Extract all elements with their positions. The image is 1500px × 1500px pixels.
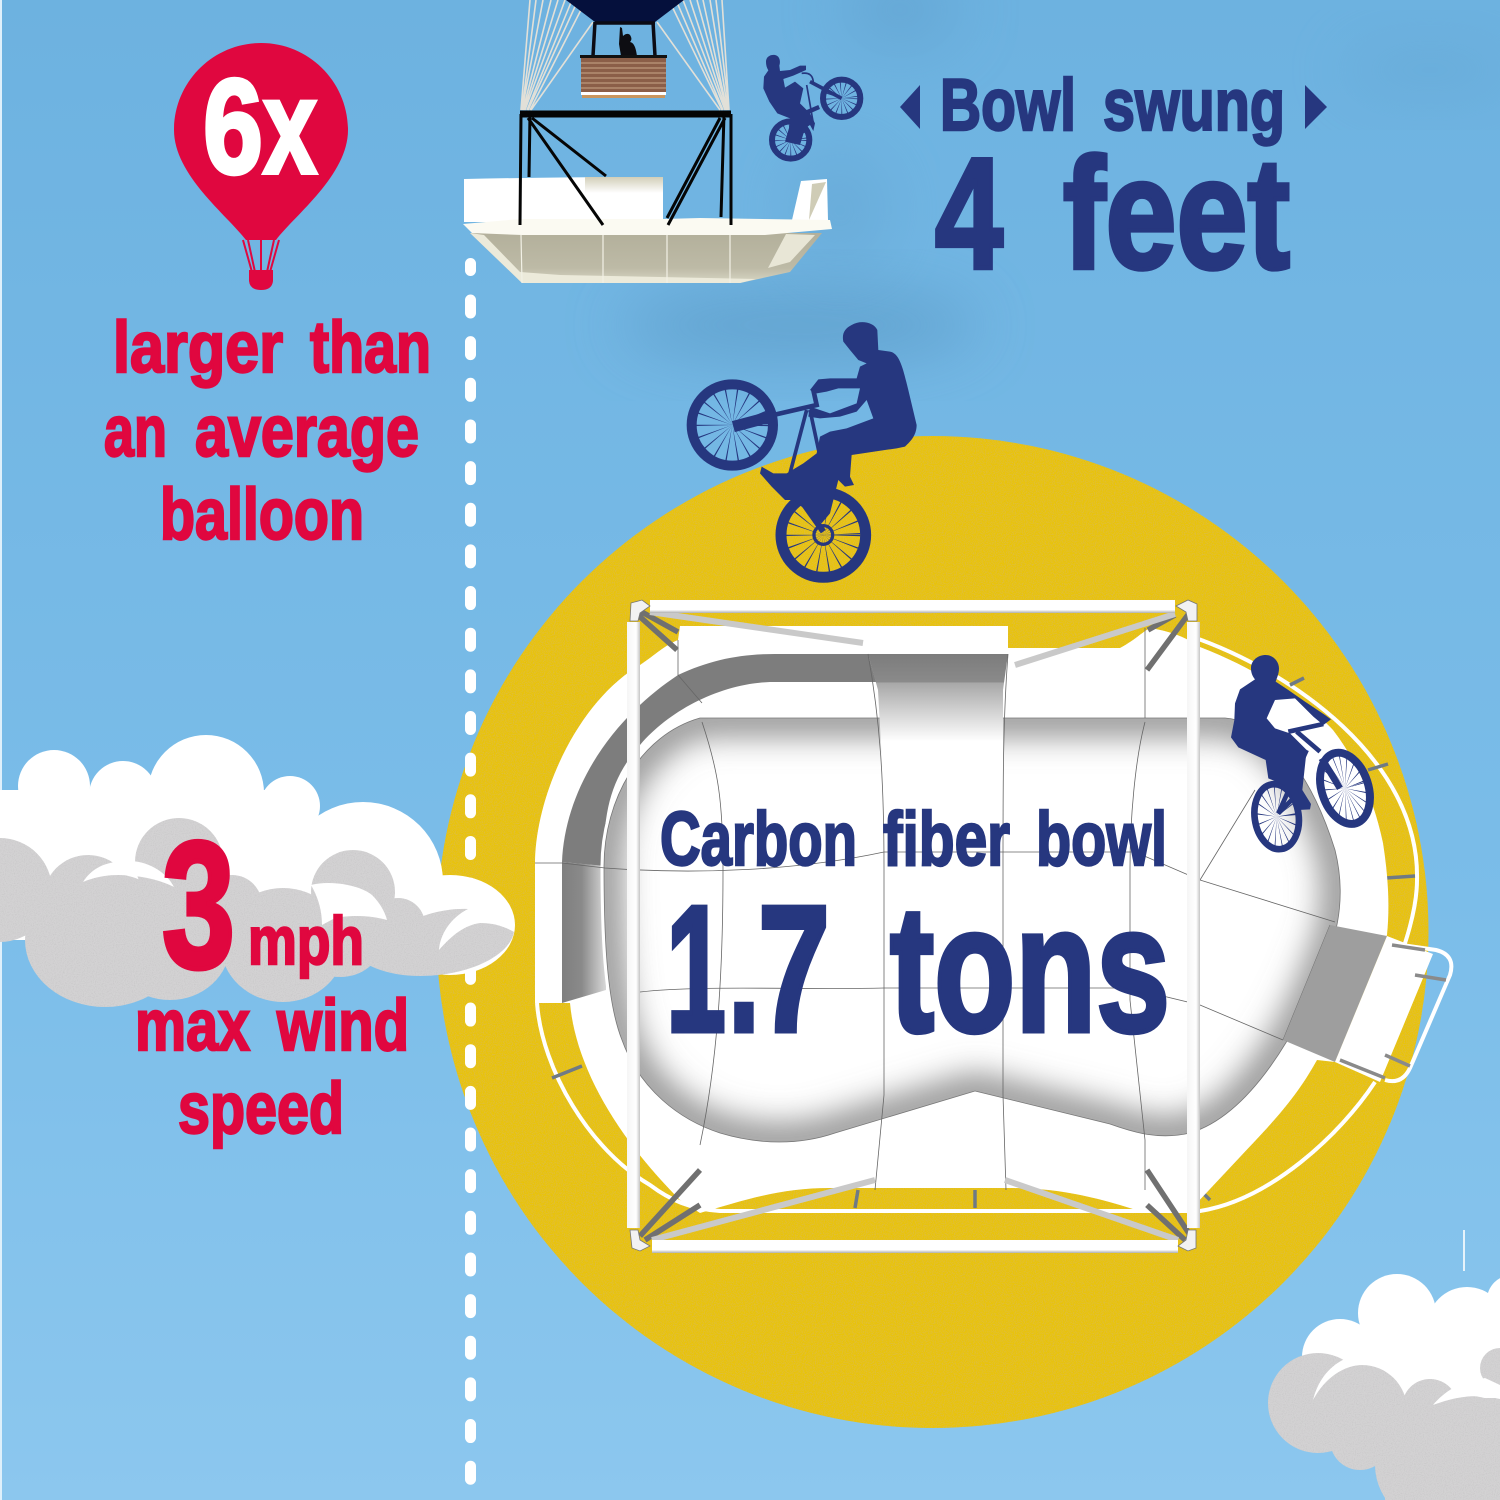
caption: larger (113, 308, 283, 388)
caption: than (310, 308, 431, 388)
cyclist silhouette, top (763, 55, 860, 159)
small white tick mark (1463, 1230, 1465, 1271)
carbon fiber bowl, top view (535, 600, 1451, 1253)
bowl lip (604, 718, 1340, 1142)
hot air balloon and suspended bowl, side view (463, 0, 832, 283)
value (162, 805, 364, 1006)
value: tons (890, 869, 1170, 1070)
burner frame (593, 22, 655, 56)
label (660, 797, 1167, 882)
bottom bar of frame (652, 1240, 1178, 1253)
gray cloud underside (1268, 1348, 1500, 1500)
white cloud top (0, 735, 515, 975)
value (666, 869, 1170, 1070)
label: Carbon (660, 797, 857, 882)
left arrow (900, 85, 920, 129)
rider body (763, 55, 820, 145)
caption (104, 308, 431, 555)
pilot (619, 27, 637, 56)
bike frame (1288, 724, 1323, 752)
rear wheel (1250, 781, 1303, 852)
top bar of frame (650, 600, 1175, 613)
ring spokes (552, 678, 1415, 1208)
rider body (1231, 655, 1331, 810)
value: mph (248, 903, 364, 979)
right post of frame (1187, 622, 1200, 1228)
white crescents (83, 861, 387, 925)
gray curved channel (562, 654, 876, 866)
value: . (728, 869, 760, 1070)
stat: 6x larger balloon (104, 43, 431, 555)
value: feet (1063, 126, 1290, 302)
rider body (760, 322, 917, 523)
yellow circle (436, 436, 1428, 1428)
caption (135, 986, 409, 1149)
rear wheel (772, 121, 809, 159)
balloon envelope (566, 0, 684, 22)
label: swung (1103, 65, 1285, 146)
stat: carbon fiber bowl 1.7 tons (660, 797, 1170, 1070)
caption: an (104, 392, 167, 472)
center shaded section (868, 654, 1008, 800)
white deck (535, 626, 1388, 1213)
value: 6x (203, 51, 317, 202)
outer safety ring (537, 636, 1417, 1211)
value (935, 126, 1290, 302)
panel seams (535, 628, 1335, 1190)
rear wheel (781, 493, 866, 577)
stat: 3 mph max wind speed (135, 805, 409, 1149)
white cloud top (1302, 1274, 1500, 1410)
bowl rim (604, 718, 1340, 1142)
front wheel (692, 384, 773, 466)
caption: balloon (160, 475, 364, 555)
caption: average (195, 392, 419, 472)
cyclist silhouette, center (692, 322, 917, 577)
ramp, gray face (1283, 925, 1387, 1062)
caption: wind (276, 986, 409, 1066)
cloud, bottom right (1268, 1274, 1500, 1500)
ramp, white platform (1335, 936, 1433, 1082)
icon: red balloon pin (174, 43, 348, 290)
label (940, 65, 1285, 146)
left post of frame (627, 622, 640, 1228)
right arrow (1305, 85, 1327, 129)
label: bowl (1036, 797, 1167, 882)
front wheel (823, 80, 860, 117)
label: fiber (883, 797, 1010, 882)
cloud, left (0, 735, 515, 1007)
bike frame (810, 82, 842, 98)
gray lower channel (562, 862, 606, 1003)
dashed divider line (465, 258, 476, 1484)
frame corners (630, 600, 1197, 1251)
label: Bowl (940, 65, 1076, 146)
support tubes and struts (638, 611, 1190, 1240)
value: 7 (758, 869, 830, 1070)
cyclist silhouette, right (1231, 655, 1379, 852)
stat: bowl swung 4 feet (900, 65, 1327, 302)
gray cloud underside (0, 818, 514, 1007)
front wheel (1311, 746, 1379, 830)
ramp handrail (1340, 944, 1451, 1081)
basket (580, 55, 667, 98)
caption: speed (178, 1069, 344, 1149)
caption: max (135, 986, 250, 1066)
bike frame (733, 416, 773, 427)
bowl interior (604, 718, 1340, 1142)
bowl side view (463, 177, 832, 283)
black rigging frame (520, 114, 731, 225)
value: 1 (666, 869, 726, 1070)
value: 6x: 6 (203, 51, 263, 202)
value: 3 (162, 805, 235, 1006)
value: 6x: x (263, 51, 317, 202)
balloon ropes (521, 0, 729, 110)
value: 4 (935, 126, 1003, 302)
white crescents (1313, 1358, 1500, 1405)
